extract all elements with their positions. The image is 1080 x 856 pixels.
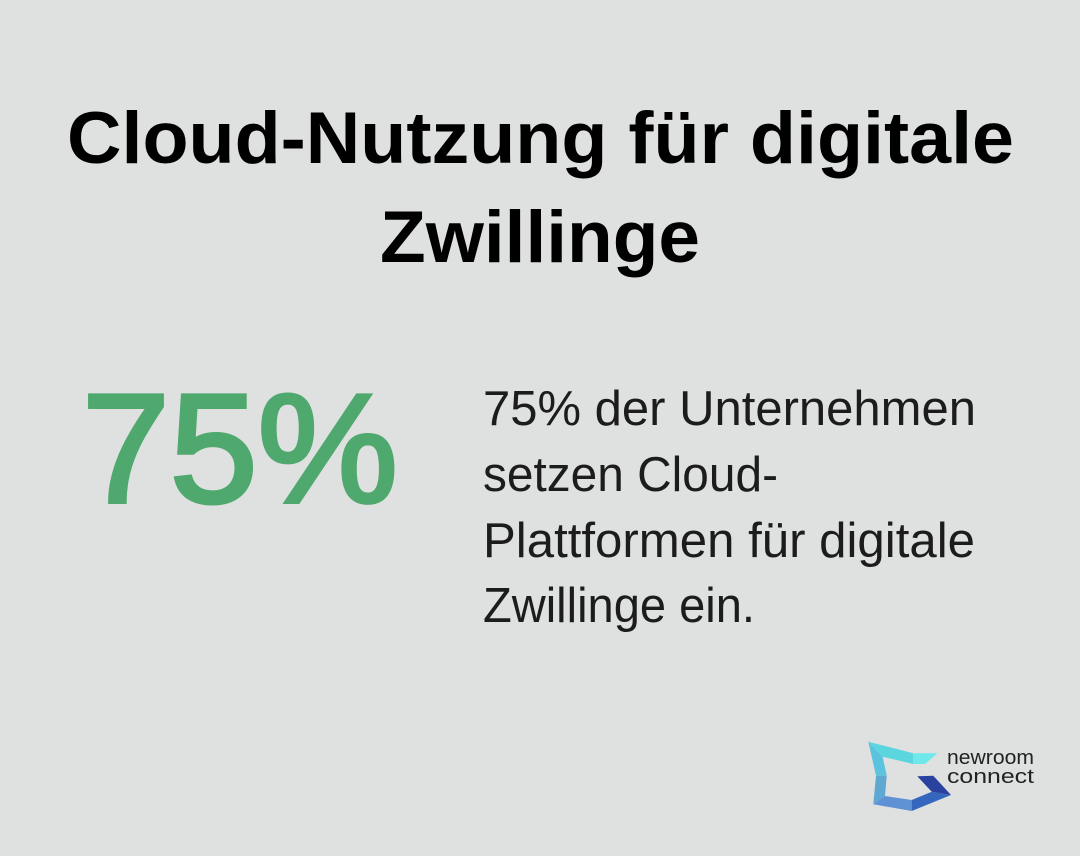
title: Zwillinge [380,197,700,278]
logo wordmark: connect [947,766,1035,788]
title [67,98,1014,278]
logo: newroom connect [868,742,1035,811]
description text: setzen Cloud- [483,448,778,502]
title: Cloud-Nutzung für digitale [67,98,1014,179]
description text: Plattformen für digitale [483,514,975,568]
description text [483,382,976,633]
logo wordmark [947,747,1035,788]
description text: Zwillinge ein. [483,579,755,633]
logo wordmark: newroom [947,747,1034,769]
big statistic: 75%: 75% [82,362,398,535]
logo icon [868,742,951,811]
description text: 75% der Unternehmen [483,382,976,436]
